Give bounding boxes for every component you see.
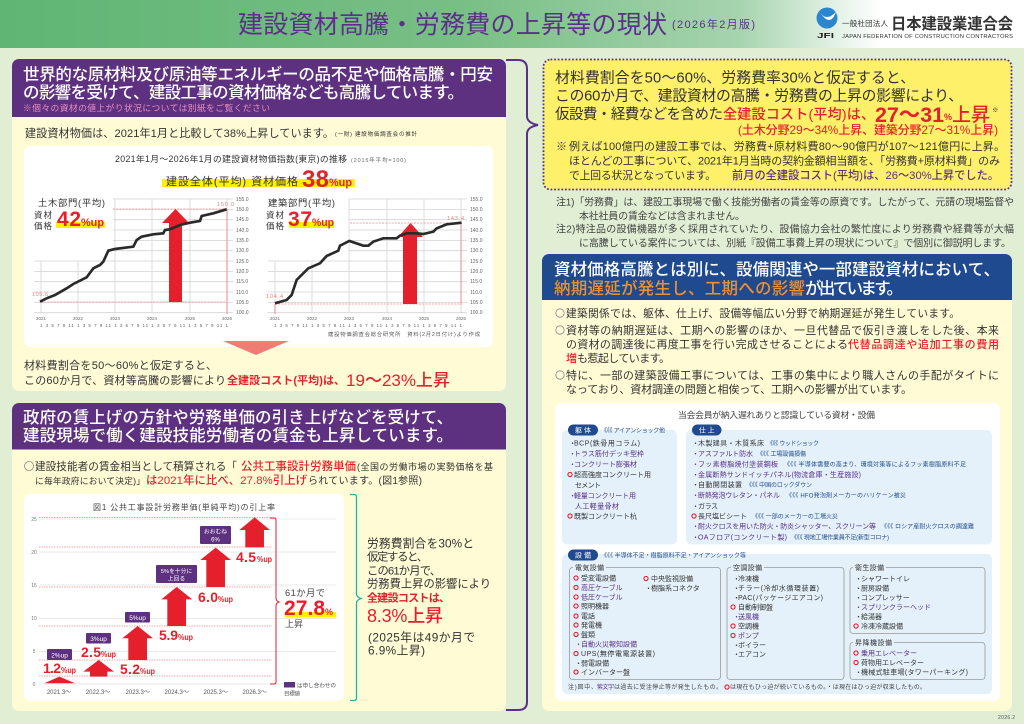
group: electrical: 高圧ケーブル [581,583,623,592]
bar arrow chart: labour rate: 上回る [168,574,185,582]
overall callout: 38% up: %up [329,177,352,189]
material cost conclusion [24,358,450,390]
line chart: civil engineering: 2024 [147,316,158,321]
callout: total construction cost: (土木分野29～34%上昇、建築分野27～31%上昇) [738,123,998,137]
line chart: building: 150.0 [470,207,483,213]
delay description: 資材等の納期遅延は、工期への影響のほか、一旦代替品で仮引き渡しをした後、本来 [566,323,999,337]
group: electrical [570,563,720,680]
group: air conditioning: エアコン [738,650,766,658]
group: electrical: UPS(無停電電源装置) [581,649,655,658]
line chart: civil engineering: 110.0 [236,290,248,296]
group: sanitary: ・ [855,604,862,612]
group: electrical: インバーター盤 [581,668,630,676]
callout: total construction cost: ※ [992,107,998,114]
list footnote: 紫文字 [597,683,614,691]
logo: Japan Federation of Construction Contractors [816,8,1014,40]
group: air conditioning: 空調設備 [733,563,762,572]
box: structural frame [562,424,677,544]
wage description: (全国の労働市場の実勢価格を基 [357,461,493,472]
material price summary [25,126,417,140]
header band [0,0,1024,48]
arrow: civil rise [162,209,189,302]
line chart: building: 100.0 [470,310,483,316]
group: air conditioning: ポンプ [738,632,759,640]
callout: total construction cost: この60か月で、建設資材の高騰・労務費の上昇の影響により、 [555,86,963,104]
legend: 目標値 [284,690,300,698]
box: structural frame: 超高強度コンクリート用 [574,470,651,479]
bar arrow chart: labour rate: %up [61,665,76,675]
overall callout: 38% up: 38 [302,166,329,193]
box: structural frame: 既製コンクリート杭 [574,512,637,520]
panel heading: delivery delays: が出ています。 [805,278,903,298]
line chart: building: 104.4 [266,294,283,300]
callout: total construction cost: ※ [556,141,567,153]
line chart: civil engineering: 2022 [73,316,84,321]
box: structural frame: 人工軽量骨材 [575,502,619,510]
box: structural frame: ・ [569,440,576,448]
line chart: building: 130.0 [470,248,483,254]
bar arrow chart: labour rate: 25 [31,517,37,523]
group: sanitary [850,563,985,634]
group: air conditioning: ・ [733,586,740,592]
box: finishing: フッ素樹脂焼付塗装鋼板 [698,460,778,468]
legend [284,682,336,698]
bar arrow chart: labour rate: 2022.3～ [86,690,110,696]
bar arrow chart: labour rate: 5 [33,649,36,655]
bar arrow chart: labour rate: 1.2 [43,660,61,676]
wage description: 建設技能者の賃金相当として積算される「 [35,460,237,473]
line chart: building: 115.0 [470,279,482,285]
line chart: civil engineering: 135.0 [236,238,249,244]
group: air conditioning: 送風機 [738,612,759,621]
panel heading: wages [12,403,506,450]
line chart: civil engineering: 2025 [185,316,196,321]
delay description: 特に、一部の建築設備工事については、工事の集中により職人さんの手配がタイトに [566,368,999,382]
wage description: に毎年政府において決定)」 [35,475,145,486]
panel heading: material prices: ※個々の資材の値上がり状況については別紙をご覧ください [23,102,270,113]
box: finishing: 《《《 半導体需要の高まり、環境対策等によるフッ素樹脂原料不足 [784,460,966,468]
group: elevators [850,638,985,680]
group: electrical: 低圧ケーブル [581,592,623,602]
labour cost conclusion: 労務費上昇の影響により [367,576,491,590]
box: equipment [562,550,992,694]
line chart: civil engineering [32,197,249,328]
callout: total construction cost: % [944,112,952,122]
box: finishing: 耐火クロスを用いた防火・防炎シャッター、スクリーン等 [698,522,876,530]
callout: total construction cost: 上昇 [952,104,990,126]
panel: delivery delays [542,254,1012,711]
box: finishing: ガラス [698,502,718,510]
bar arrow chart: labour rate: %up [140,666,155,676]
line chart: civil engineering: 155.0 [236,197,249,203]
group: electrical: ・ [575,660,582,668]
callout: total construction cost: で上回る状況となっています。 [569,168,716,182]
box: finishing: 木製建具・木質系床 [698,438,764,448]
list title: 当会会員が納入遅れありと認識している資材・設備 [678,409,875,420]
callout: total construction cost: 全建設コスト(平均)は、 [723,106,875,122]
material cost conclusion: 材料費割合を50～60%と仮定すると、 [24,358,217,372]
panel: wages [12,403,506,711]
callout: total construction cost: 仮設費・経費などを含めた [555,106,723,123]
line chart: civil engineering: 105.0 [236,300,249,306]
group: electrical: 盤類 [581,630,595,639]
list footnote: は過去に受注停止等が発生したもの。 [614,683,722,691]
panel heading: material prices: 世界的な原材料及び原油等エネルギーの品不足や価格高騰・円安 [23,65,493,84]
line chart: civil engineering: 2023 [110,316,121,321]
line chart: building: 資材 [266,210,284,220]
box: finishing: ・ [692,534,699,542]
line chart: building: %up [312,217,334,229]
group: air conditioning: チラー(冷却水循環装置) [738,584,819,592]
line chart: civil engineering: 150.0 [217,202,234,208]
wage description [24,459,493,487]
legend: は申し合わせの [297,682,336,690]
bar arrow chart: labour rate: 2023.3～ [126,690,150,696]
group: elevators: 乗用エレベーター [861,648,917,658]
callout: total construction cost [544,60,1012,190]
group: sanitary: スプリンクラーヘッド [861,604,931,612]
line chart: civil engineering: 125.0 [236,259,249,265]
box: structural frame: トラス筋付デッキ型枠 [574,449,644,458]
group: air conditioning: 自動制御盤 [738,602,773,612]
group: elevators: 昇降機設備 [855,638,892,647]
group: sanitary: ・ [855,614,862,621]
total wage increase callout: 上昇 [285,619,303,629]
group: sanitary: 冷凍冷蔵設備 [861,622,903,630]
box: structural frame: セメント [575,482,601,490]
bar arrow chart: labour rate: 4.5 [236,549,256,565]
box: finishing: ・ [692,451,699,458]
bar arrow chart: labour rate: %up [218,594,233,604]
line chart: building: 140.0 [470,228,483,234]
delay description: なっており、資材調達の問題と相俟って、工期への影響が出ています。 [566,382,912,396]
group: sanitary: シャワートイレ [861,575,910,583]
chart title: 図1 公共工事設計労務単価(単純平均)の引上率 [93,502,275,512]
panel heading: material prices [12,59,506,117]
total wage increase callout: 27.8 [284,597,325,620]
callout: total construction cost: 例えば100億円の建設工事では、労務費+原材料費80～90億円が107～121億円に上昇。 [569,139,1005,153]
box: finishing: 金属断熱サンドイッチパネル(物流倉庫・生産施設) [698,470,861,479]
group: air conditioning: ・ [733,614,740,621]
line chart: building: 価格 [266,221,284,231]
labour cost conclusion: 仮定すると、 [367,550,428,564]
logo: Japan Federation of Construction Contractors: 一般社団法人 [842,18,888,28]
labour cost conclusion: (2025年は49か月で [368,630,475,644]
group: electrical: 発電機 [581,620,602,630]
box: equipment: 《《《 半導体不足・樹脂原料不足・アイアンショック等 [601,552,746,560]
total wage increase callout: % [325,607,333,617]
box: finishing: 仕 上 [699,426,715,434]
labour cost conclusion: 全建設コストは、 [367,590,450,604]
group: air conditioning: PAC(パッケージエアコン) [738,594,823,602]
bar arrow chart: labour rate [31,517,336,696]
bar arrow chart: labour rate: 2021.3～ [47,690,71,696]
group: air conditioning: 冷凍機 [738,574,759,583]
group: air conditioning: ・ [733,642,740,650]
material price summary: (一財) 建設物価調査会の推計 [335,130,417,138]
callout: total construction cost: 前月の全建設コスト(平均)は、26～30%上昇でした。 [732,168,999,182]
bar arrow chart: labour rate: おおむね [204,528,227,536]
issue date: 2026.2 [998,715,1015,721]
bar arrow chart: labour rate: 2025.3～ [204,690,228,696]
box: finishing: ・ [692,524,699,530]
line chart: building: 1 3 5 7 9 11 1 3 5 7 9 11 1 3 5 7 9 11 1 3 5 7 9 11 1 3 5 7 9 11 1 [274,323,462,328]
delay description: の資材の調達後に再度工事を行い完成させることによる [566,337,848,351]
box: finishing: 自動開閉装置 [698,480,742,489]
box: finishing: ・ [692,492,699,500]
edition date: (2026年2月版) [672,17,755,31]
line chart: building: 2025 [419,316,430,321]
title: 建設資材高騰・労務費の上昇等の現状 [238,11,667,39]
material price summary: 建設資材物価は、2021年1月と比較して38%上昇しています。 [25,126,334,140]
overall callout: 38% up: 建設全体(平均) 資材価格 [166,174,298,188]
box: finishing [686,424,992,544]
line chart: civil engineering: 145.0 [236,217,249,223]
panel heading: wages: 政府の賃上げの方針や労務単価の引き上げなどを受けて、 [23,408,453,427]
line chart: building [266,197,483,328]
group: electrical: ・ [645,586,652,592]
arrow: building rise [398,223,423,304]
box: structural frame: ・ [569,451,576,458]
box: structural frame: 《《《 アイアンショック他 [601,426,665,434]
box: finishing: アスファルト防水 [698,449,753,458]
line chart: civil engineering: 1 3 5 7 9 11 1 3 5 7 9 11 1 3 5 7 9 11 1 3 5 7 9 11 1 3 5 7 9 11 1 [40,323,228,328]
source note: 建設物価調査会総合研究所 資料(2月2日付け)より作成 [328,330,481,338]
line chart: building: 2022 [307,316,318,321]
line chart: civil engineering: 2021 [36,316,47,321]
group: air conditioning: ・ [733,652,740,658]
material cost conclusion: 全建設コスト(平均)は、 [227,373,345,387]
delay description: も惹起しています。 [577,352,670,365]
list footnote: は現在もひっ迫が続いているもの。・は現在はひっ迫が収束したもの。 [730,683,926,691]
box: structural frame: ・ [569,462,576,468]
labour cost conclusion: 労務費割合を30%と [367,536,474,550]
panel heading: material prices: の影響を受けて、建設工事の資材価格なども高騰しています。 [23,83,464,102]
group: sanitary: 給湯器 [861,612,882,621]
logo: Japan Federation of Construction Contractors: JAPAN FEDERATION OF CONSTRUCTION CONTRACTORS [842,34,1013,40]
bar arrow chart: labour rate: 6% [211,538,221,544]
group: sanitary: ・ [855,576,862,583]
notes: 注2)特注品の設備機器が多く採用されていたり、設備協力会社の繁忙度により労務費や経費等が大幅 [556,222,1014,236]
bar arrow chart: labour rate: 2024.3～ [165,690,189,696]
bar arrow chart: labour rate: 0 [33,682,36,688]
line chart: civil engineering: 115.0 [236,279,248,285]
line chart: building: 120.0 [470,269,483,275]
group: sanitary: 衛生設備 [855,563,884,572]
chart title: (2015年平均=100) [351,156,406,164]
group: electrical: 弱電設備 [581,658,609,668]
line chart: civil engineering: 130.0 [236,248,249,254]
panel heading: delivery delays: 納期遅延が発生し、工期への影響 [554,278,805,298]
group: air conditioning: 空調機 [738,622,759,630]
group: electrical: 照明機器 [581,602,609,610]
callout: total construction cost: 27～31 [875,103,944,127]
line chart: civil engineering: 120.0 [236,269,249,275]
group: electrical: 受変電設備 [581,574,616,582]
box: finishing: 断熱発泡ウレタン・パネル [698,490,780,500]
box: finishing: ・ [692,482,699,489]
delay description [556,307,999,396]
bar arrow chart: labour rate: 15 [31,583,37,589]
line chart: building: 135.0 [470,238,483,244]
list footnote: 注)図中、 [568,683,597,691]
bar arrow chart: labour rate: 2026.3～ [243,690,267,696]
red bracket [270,518,279,684]
box: structural frame: ・ [569,493,576,500]
group: sanitary: コンプレッサー [861,594,910,602]
box: structural frame: コンクリート膨張材 [574,460,637,468]
line chart: building: 2021 [270,316,281,321]
callout: total construction cost: ほとんどの工事について、2021年1月当時の契約金額相当額を、「労務費+原材料費」のみ [569,154,1000,168]
box: equipment: 設 備 [575,550,591,560]
panel heading: wages: 建設現場で働く建設技能労働者の賃金も上昇しています。 [23,426,453,445]
line chart: civil engineering: 2026 [222,316,233,321]
wage description: られています。(図1参照) [308,475,422,487]
labour cost conclusion: 6.9%上昇) [368,644,425,658]
chart title: 2021年1月～2026年1月の建設資材物価指数(東京)の推移 [115,153,347,164]
group: electrical: ・ [575,642,582,648]
total wage increase callout [284,588,336,629]
line chart: civil engineering: 150.0 [236,207,249,213]
group: air conditioning: ・ [733,595,740,602]
bar arrow chart: labour rate: 10 [31,616,37,622]
material cost conclusion: この60か月で、資材等高騰の影響により [24,373,226,387]
line chart: civil engineering: 140.0 [236,228,249,234]
box: structural frame: BCP(鉄骨用コラム) [574,438,640,448]
box: finishing: ・ [692,504,699,510]
logo: Japan Federation of Construction Contractors: JFI [817,33,834,40]
box: structural frame: 軽量コンクリート用 [574,491,636,500]
bar arrow chart: labour rate: %up [101,649,116,659]
logo: Japan Federation of Construction Contractors: 日本建設業連合会 [891,15,1014,33]
line chart: building: 2026 [456,316,467,321]
labour cost conclusion: この61か月で、 [367,564,441,578]
line chart: building: 2023 [344,316,355,321]
wage description: 公共工事設計労務単価 [241,459,356,473]
line chart: building: 37 [288,208,312,231]
wage chart card [24,494,344,701]
line chart: building: 145.0 [470,217,483,223]
line chart: civil engineering: 105.6 [32,292,48,298]
wage description: は2021年に比べ、27.8%引上げ [146,473,308,487]
box: finishing: ・ [692,472,699,479]
line chart: civil engineering: 資材 [34,210,52,220]
line chart: building: 143.4 [447,216,464,222]
bar arrow chart: labour rate: 20 [31,550,37,556]
labour cost conclusion: 8.3%上昇 [367,606,443,626]
line chart: civil engineering: 価格 [34,221,52,231]
group: air conditioning: ・ [733,576,740,583]
box: finishing: 《《《 工場設備損傷 [757,450,806,458]
materials list card [555,403,1000,701]
group: electrical: 中央監視設備 [651,574,693,583]
group: electrical: 自動火災報知設備 [581,640,637,648]
bar arrow chart: labour rate: 2.5 [81,644,101,660]
box: finishing: ・ [692,440,699,448]
group: air conditioning: ボイラー [738,642,766,650]
chart card [24,146,493,347]
arrow: down triangle [223,341,289,355]
box: finishing: 《《《 ウッドショック [767,440,819,448]
total wage increase callout: 61か月で [285,588,325,598]
group: sanitary: ・ [855,595,862,602]
line chart: building: 110.0 [470,290,482,296]
box: finishing: 《《《 一部のメーカーの工場火災 [752,512,838,520]
bar arrow chart: labour rate: %up [178,632,193,642]
delay description: 代替品調達や追加工事の費用 [848,337,999,351]
panel: material prices [12,59,506,391]
bar arrow chart: labour rate: 5.2 [120,661,140,677]
group: elevators: ・ [855,670,862,676]
labour cost conclusion [367,536,491,658]
bar arrow chart: labour rate: 5.9 [159,627,178,643]
teal bracket [350,494,361,700]
box: finishing: 《《《 ロシア産耐火クロスの調達難 [881,522,974,530]
line chart: building: 155.0 [470,197,483,203]
box: finishing: 《《《 現地工場作業員不足(新型コロナ) [791,534,889,542]
notes: に高騰している案件については、別紙『設備工事費上昇の現状について』で個別に御説明します。 [579,236,1011,250]
delay description: 建築関係では、躯体、仕上げ、設備等幅広い分野で納期遅延が発生しています。 [566,307,960,320]
group: sanitary: ・ [855,586,862,592]
line chart: civil engineering: 42 [57,208,81,231]
delay description: 増 [566,351,577,365]
group: electrical: 電気設備 [575,563,604,572]
notes: 注1)「労務費」は、建設工事現場で働く技能労働者の賃金等の原資です。したがって、元請の現場監督や [556,196,1014,208]
notes [556,196,1014,250]
bar arrow chart: labour rate: 2%up [51,652,68,660]
box: structural frame: 躯 体 [575,426,591,434]
line chart: building: 2024 [382,316,393,321]
box: finishing: 《《《 HFO発泡剤メーカーのハリケーン被災 [786,492,906,500]
bar arrow chart: labour rate: 5%を十分に [161,567,192,575]
group: air conditioning [727,563,844,680]
callout: total construction cost: 材料費割合を50～60%、労務費率30%と仮定すると、 [555,70,915,86]
notes: 本社社員の賃金などは含まれません。 [579,210,745,222]
box: finishing: 《《《 中国のロックダウン [746,481,812,489]
bar arrow chart: labour rate: 5%up [129,615,146,622]
box: finishing: ・ [692,462,699,468]
bar arrow chart: labour rate: %up [257,554,272,564]
line chart: civil engineering: %up [81,217,104,229]
overall callout: 38% up [162,166,355,193]
panel heading: delivery delays [542,254,1012,300]
list footnote [568,683,926,691]
box: finishing: OAフロア(コンクリート製) [698,532,787,542]
group: elevators: 機械式駐車場(タワーパーキング) [861,668,968,676]
bar arrow chart: labour rate: 6.0 [198,589,218,605]
group: electrical: 電話 [581,612,595,620]
line chart: building: 建築部門(平均) [268,197,335,208]
line chart: civil engineering: 土木部門(平均) [38,197,105,208]
big purple brace [506,60,538,710]
line chart: building: 105.0 [470,300,483,306]
group: electrical: 樹脂系コネクタ [651,584,700,592]
group: elevators: 荷物用エレベーター [861,658,924,667]
line chart: building: 125.0 [470,259,483,265]
panel heading: delivery delays: 資材価格高騰とは別に、設備関連や一部建設資材において、 [554,260,1000,279]
group: sanitary: 厨房設備 [861,584,889,592]
bar arrow chart: labour rate: 3%up [90,636,107,643]
box: finishing: 長尺塩ビシート [698,512,747,520]
line chart: civil engineering: 100.0 [236,310,249,316]
material cost conclusion: 19～23%上昇 [346,371,450,390]
